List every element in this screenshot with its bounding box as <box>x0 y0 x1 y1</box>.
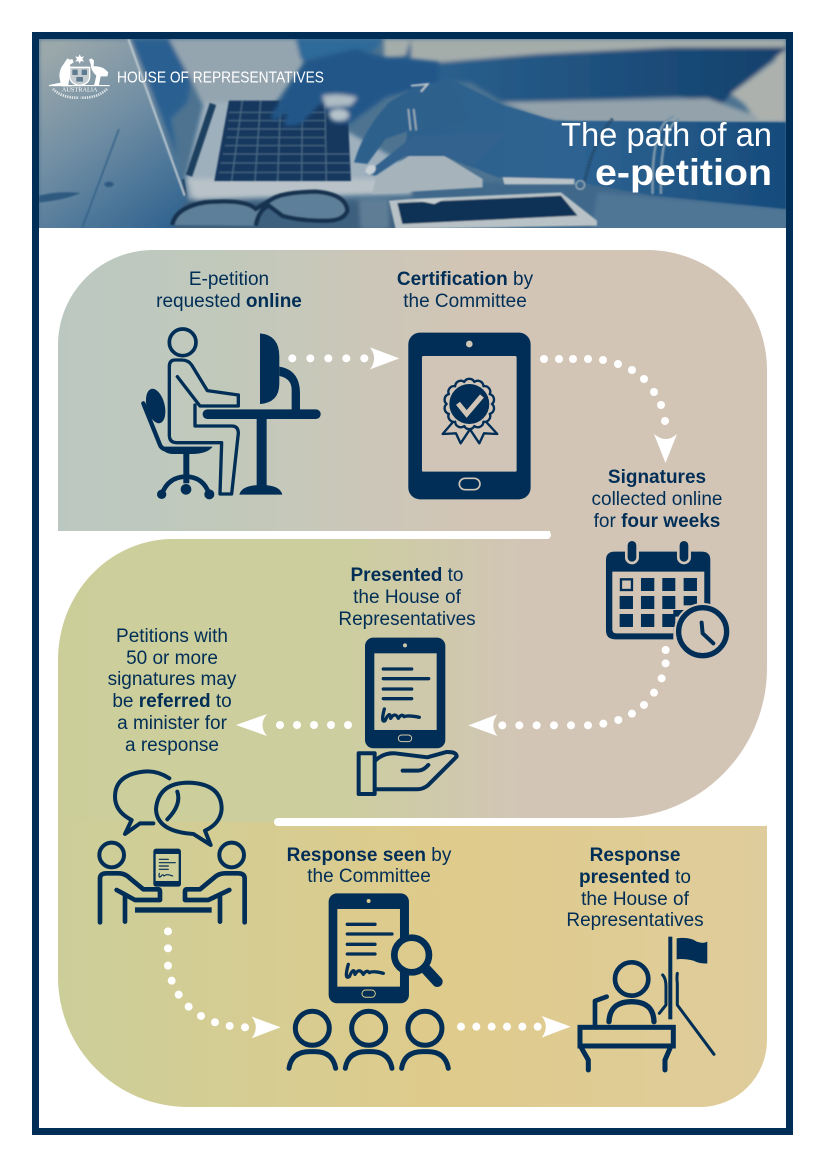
step text: signatures: Signatures <box>608 467 706 488</box>
step text: requested online: requested online <box>156 291 302 312</box>
step text: signatures: collected online <box>592 489 722 510</box>
band dividers <box>140 531 551 539</box>
arrow: referred to response seen <box>164 927 281 1038</box>
step text: presented: Representatives <box>338 609 476 630</box>
arrow: online to certification <box>288 347 399 369</box>
arrow: presented to referred <box>236 714 352 736</box>
arrow: certification to signatures <box>540 355 677 463</box>
icon: tablet with magnifier and committee members <box>289 893 448 1068</box>
panel: top band <box>58 250 767 818</box>
step text: response seen: Response seen by <box>287 845 451 866</box>
icon: calendar with clock <box>606 539 731 660</box>
header title: e-petition <box>595 152 772 193</box>
logo: Australian coat of arms <box>49 54 110 98</box>
step text: referred to a minister: a response <box>125 735 219 756</box>
arrow: response seen to response presented <box>457 1016 571 1038</box>
step text: response presented: Response <box>590 845 680 866</box>
step text: referred to a minister: a minister for <box>117 713 228 734</box>
step text: response seen: the Committee <box>307 866 431 887</box>
step text: response presented: the House of <box>581 889 690 910</box>
icon: person at computer <box>143 329 321 499</box>
forearm and palm <box>406 79 786 209</box>
step text: referred to a minister: Petitions with <box>116 626 228 647</box>
step text: referred to a minister: signatures may <box>108 669 237 690</box>
step text: referred to a minister: be referred to <box>112 691 232 712</box>
step text: response presented: Representatives <box>566 910 704 931</box>
step text: response presented: presented to <box>579 867 691 888</box>
header title <box>561 116 772 193</box>
header organisation name: HOUSE OF REPRESENTATIVES <box>117 70 324 86</box>
logo: Australian coat of arms: AUSTRALIA <box>62 87 98 94</box>
glasses <box>172 192 347 226</box>
header photo: hands typing on a laptop <box>39 39 786 232</box>
step text: certification: the Committee <box>403 291 527 312</box>
step text: signatures: for four weeks <box>594 511 720 532</box>
step text: requested online: E-petition <box>189 269 269 290</box>
arrow: signatures to presented <box>468 646 670 736</box>
icon: two people talking over a tablet <box>99 771 245 922</box>
keyboard block <box>214 101 351 181</box>
right hand fingers <box>354 83 437 165</box>
step text: presented: Presented to <box>350 565 464 586</box>
icon: tablet with certified badge <box>408 333 531 499</box>
panel: lower band <box>58 822 767 1107</box>
header title: The path of an <box>561 116 772 153</box>
icon: speaker at lectern with flag <box>580 937 714 1070</box>
step text: referred to a minister: 50 or more <box>126 648 218 669</box>
step text: presented: the House of <box>353 587 462 608</box>
blurred left hand <box>271 49 439 126</box>
icon: tablet on open hand <box>359 638 457 794</box>
step text: certification: Certification by <box>397 269 533 290</box>
bracelets <box>584 119 613 182</box>
panel: middle band <box>58 539 600 824</box>
